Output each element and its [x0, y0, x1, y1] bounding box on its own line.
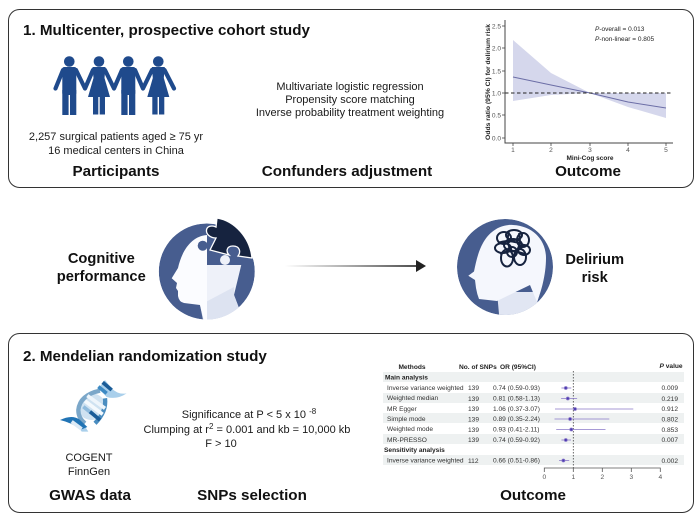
chart: odds ratio by Mini-Cog score: Odds ratio (95% CI) for delirium risk — [485, 24, 492, 140]
chart: odds ratio by Mini-Cog score: Mini-Cog score — [567, 155, 614, 162]
text: participants description — [29, 131, 203, 157]
row labels and values: 0.93 (0.41-2.11) — [493, 426, 539, 434]
row labels and values: 139 — [468, 427, 479, 434]
text: SNP selection criteria: 2 — [209, 422, 214, 431]
chart: MR forest plot: Main analysis — [385, 374, 428, 382]
text: data sources — [65, 452, 113, 478]
label: GWAS data: GWAS data — [49, 487, 131, 504]
row labels and values: 0.81 (0.58-1.13) — [493, 396, 540, 402]
label: delirium risk — [565, 252, 624, 286]
table header: P value — [660, 363, 683, 370]
label: cognitive performance: Cognitive — [68, 251, 135, 267]
text: confounder methods: Multivariate logistic regression — [276, 81, 424, 93]
panel: multicenter prospective cohort study — [8, 10, 694, 188]
table header: OR (95%CI) — [500, 364, 536, 371]
text: SNP selection criteria: -8 — [309, 407, 317, 416]
chart: MR forest plot: Sensitivity analysis — [384, 447, 445, 454]
chart: odds ratio by Mini-Cog score: 2 — [549, 147, 553, 154]
row labels and values: Weighted median — [387, 395, 439, 402]
chart: odds ratio by Mini-Cog score: 1 — [511, 147, 515, 154]
forest axis: 2 — [600, 474, 604, 481]
table header: Methods — [398, 364, 426, 371]
text: confounder methods — [256, 81, 444, 119]
text: participants description: 16 medical centers in China — [48, 145, 185, 157]
row labels and values: 0.009 — [662, 385, 678, 392]
chart: odds ratio by Mini-Cog score: 1.0 — [492, 90, 501, 98]
row labels and values: 0.912 — [662, 406, 678, 413]
label: participants: Participants — [73, 163, 159, 180]
chart: odds ratio by Mini-Cog score: 5 — [664, 147, 668, 154]
text: participants description: 2,257 surgical patients aged ≥ 75 yr — [29, 131, 203, 143]
row labels and values: 139 — [468, 396, 479, 403]
text: SNP selection criteria — [144, 407, 350, 450]
icon: group of four patients — [56, 56, 174, 115]
row labels and values: Weighted mode — [387, 426, 433, 433]
row labels and values: 139 — [468, 416, 479, 424]
chart: MR forest plot — [383, 363, 684, 481]
text: SNP selection criteria: Significance at P < 5 x 10 — [182, 409, 306, 421]
forest axis — [542, 468, 662, 481]
arrow: causal direction — [285, 260, 426, 272]
chart: odds ratio by Mini-Cog score: 0.0 — [492, 136, 501, 142]
row labels and values: 0.002 — [662, 458, 678, 465]
row labels and values: Inverse variance weighted — [387, 385, 464, 392]
text: confounder methods: Propensity score matching — [285, 94, 415, 106]
row labels and values: Inverse variance weighted — [387, 458, 464, 464]
text: SNP selection criteria: = 0.001 and kb = 10,000 kb — [213, 424, 350, 436]
chart: odds ratio by Mini-Cog score: 3 — [588, 147, 592, 154]
row labels and values: 112 — [468, 458, 479, 465]
row labels and values — [387, 385, 678, 465]
forest axis: 1 — [571, 474, 575, 481]
row labels and values: 0.802 — [662, 416, 678, 424]
icon: dark puzzle piece — [206, 218, 252, 258]
row labels and values: MR Egger — [387, 406, 417, 413]
label: SNPs selection: SNPs selection — [197, 487, 307, 504]
text: SNP selection criteria: Clumping at r — [144, 424, 209, 436]
forest axis: 0 — [542, 474, 546, 481]
icon: head with tangled brain — [457, 219, 553, 325]
text: confounder methods: Inverse probability treatment weighting — [256, 107, 444, 119]
chart: odds ratio by Mini-Cog score: 1.5 — [492, 68, 501, 76]
table header — [398, 363, 683, 371]
icon: head with puzzle piece — [159, 218, 255, 325]
forest axis: 3 — [629, 474, 633, 481]
chart: odds ratio by Mini-Cog score: 4 — [626, 147, 630, 154]
row labels and values: 0.74 (0.59-0.92) — [493, 437, 540, 444]
label: confounders adjustment: Confunders adjustment — [262, 163, 432, 180]
heading: study 2: 2. Mendelian randomization study — [23, 348, 267, 365]
text: SNP selection criteria: F > 10 — [205, 438, 237, 450]
row labels and values: 0.007 — [662, 437, 678, 444]
row labels and values: MR-PRESSO — [387, 437, 427, 444]
label: delirium risk: Delirium — [565, 252, 624, 268]
row labels and values: 0.853 — [662, 427, 678, 434]
forest axis: 4 — [658, 474, 662, 481]
panel: mendelian randomization study — [8, 334, 694, 512]
label: outcome: Outcome — [555, 163, 621, 180]
chart: odds ratio by Mini-Cog score: P-non-linear = 0.805 — [595, 36, 654, 43]
forest intervals — [554, 386, 633, 462]
chart: odds ratio by Mini-Cog score: 2.0 — [492, 46, 501, 52]
text: data sources: FinnGen — [68, 466, 110, 478]
row labels and values: 0.66 (0.51-0.86) — [493, 458, 540, 464]
row labels and values: 139 — [468, 385, 479, 392]
chart: odds ratio by Mini-Cog score: P-overall = 0.013 — [595, 26, 645, 33]
text: data sources: COGENT — [65, 452, 113, 464]
chart: odds ratio by Mini-Cog score: 0.5 — [492, 112, 501, 120]
table header: No. of SNPs — [459, 364, 497, 371]
row labels and values: 0.89 (0.35-2.24) — [493, 416, 540, 423]
row labels and values: 0.74 (0.59-0.93) — [493, 385, 540, 392]
heading: study 1: 1. Multicenter, prospective cohort study — [23, 22, 310, 39]
label: outcome: Outcome — [500, 487, 566, 504]
label: cognitive performance — [57, 251, 146, 285]
row labels and values: 1.06 (0.37-3.07) — [493, 406, 540, 413]
label: delirium risk: risk — [582, 270, 609, 286]
row labels and values: 139 — [468, 406, 479, 413]
icon: DNA helix — [60, 380, 127, 432]
label: cognitive performance: performance — [57, 269, 146, 285]
row labels and values: 0.219 — [662, 396, 678, 403]
chart: odds ratio by Mini-Cog score — [485, 20, 673, 162]
chart: odds ratio by Mini-Cog score: 2.5 — [492, 24, 501, 30]
row labels and values: 139 — [468, 437, 479, 444]
icon: tangled brain scribble — [495, 230, 530, 266]
row labels and values: Simple mode — [387, 416, 426, 423]
